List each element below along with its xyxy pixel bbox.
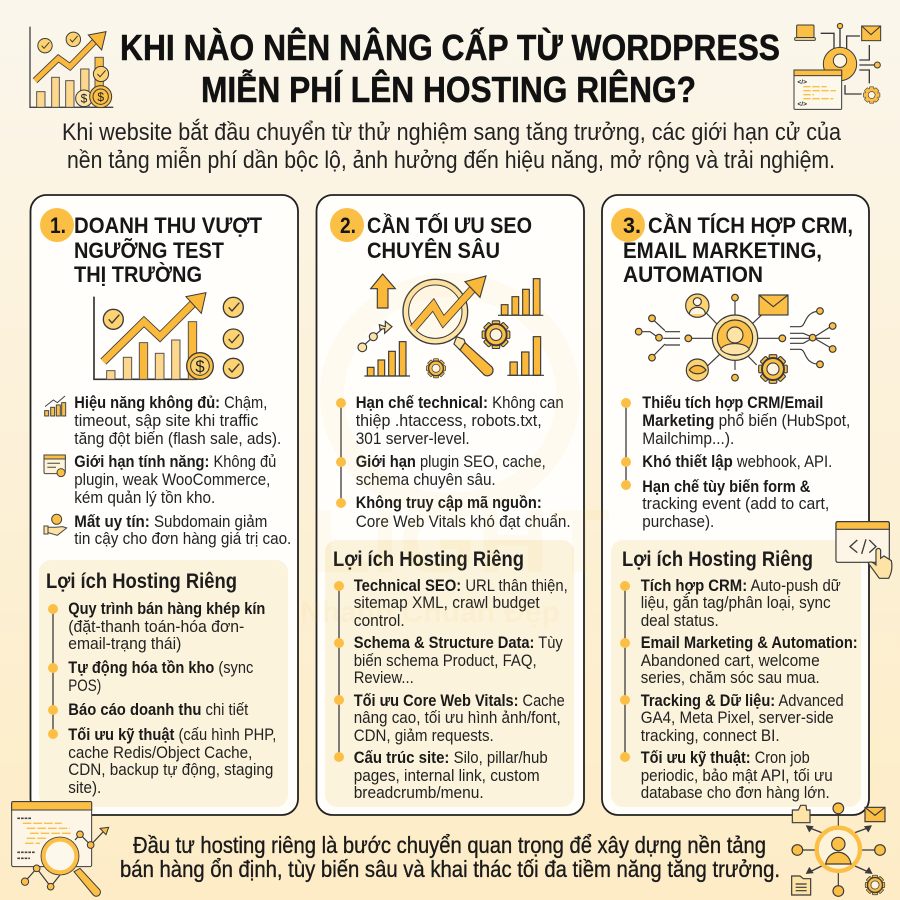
icon: growth chart with coins: $	[81, 92, 88, 106]
benefits box 3: periodic, bảo mật API, tối ưu	[641, 767, 833, 785]
benefits box 3: tracking, connect BI.	[641, 727, 780, 745]
watermark	[300, 285, 610, 629]
heading 2	[367, 212, 532, 263]
benefits box 3: Tối ưu kỹ thuật: Cron job	[641, 749, 810, 767]
icon: network with code window	[794, 23, 881, 109]
benefits box 2: pages, internal link, custom	[354, 767, 540, 785]
benefits box 1: Quy trình bán hàng khép kín	[68, 600, 265, 618]
issue list 1: tăng đột biến (flash sale, ads).	[74, 430, 281, 448]
title	[120, 26, 780, 110]
issue list 3: purchase).	[642, 513, 714, 531]
watermark: LIGHT	[310, 492, 610, 592]
issue list 3: Marketing phổ biến (HubSpot,	[642, 412, 850, 430]
footer text	[120, 832, 780, 882]
subtitle	[62, 119, 842, 174]
title: MIỄN PHÍ LÊN HOSTING RIÊNG?	[201, 68, 696, 110]
chart: revenue growth: $	[195, 357, 205, 376]
benefits box 1: Báo cáo doanh thu chi tiết	[68, 701, 249, 719]
heading 1: DOANH THU VƯỢT	[74, 213, 263, 238]
icon: user network	[792, 803, 885, 896]
benefits box 1: email-trạng thái)	[68, 635, 181, 653]
issue list 2: Core Web Vitals khó đạt chuẩn.	[356, 513, 571, 531]
benefits box 3: Tích hợp CRM: Auto-push dữ	[641, 577, 841, 595]
benefits box 1: cache Redis/Object Cache,	[68, 744, 252, 762]
heading 3: CẦN TÍCH HỢP CRM,	[648, 213, 853, 238]
benefits box 1: Lợi ích Hosting Riêng	[46, 569, 237, 593]
chart: revenue growth	[94, 293, 243, 379]
issue list 2: 301 server-level.	[356, 430, 470, 448]
benefits box 1: CDN, backup tự động, staging	[68, 761, 273, 779]
benefits box 3: liệu, gắn tag/phân loại, sync	[641, 593, 831, 612]
benefits box 1: Tự động hóa tồn kho (sync	[68, 659, 253, 677]
panel: SEO	[316, 195, 584, 815]
issue list 2: Hạn chế technical: Không can	[356, 394, 564, 412]
heading 3	[623, 213, 853, 287]
benefits box 3: Abandoned cart, welcome	[641, 652, 820, 670]
benefits box 1: site).	[68, 779, 101, 797]
issue list 1: Mất uy tín: Subdomain giảm	[74, 513, 267, 531]
issue list 2: Giới hạn plugin SEO, cache,	[356, 453, 546, 471]
benefits box 2: breadcrumb/menu.	[354, 784, 484, 802]
illustration: SEO magnifier	[358, 274, 544, 378]
benefits box 2	[325, 540, 574, 807]
panel: doanh thu	[30, 195, 298, 815]
benefits box 2: Cấu trúc site: Silo, pillar/hub	[354, 749, 548, 767]
number badge 1	[40, 208, 74, 242]
icon: code window with pointer hand	[836, 522, 892, 578]
benefits box 3: database cho đơn hàng lớn.	[641, 784, 830, 802]
heading 1: THỊ TRƯỜNG	[74, 262, 202, 287]
issue list 1: kém quản lý tồn kho.	[74, 489, 215, 507]
issue list 1: timeout, sập site khi traffic	[74, 412, 258, 430]
heading 1: NGƯỠNG TEST	[74, 238, 225, 263]
issue list 3: Thiếu tích hợp CRM/Email	[642, 394, 823, 412]
benefits box 3: Tracking & Dữ liệu: Advanced	[641, 692, 844, 710]
issue list 3: Mailchimp...).	[642, 430, 734, 448]
benefits box 3: series, chăm sóc sau mua.	[641, 669, 820, 687]
heading 3: AUTOMATION	[623, 262, 763, 287]
icon: network with code window: </>	[797, 79, 807, 86]
benefits box 2: Technical SEO: URL thân thiện,	[354, 577, 568, 595]
issue list 3	[621, 394, 850, 531]
issue list 3: tracking event (add to cart,	[642, 495, 829, 513]
icon: growth chart with coins	[30, 27, 113, 108]
issue list 2	[336, 394, 571, 531]
benefits box 1	[39, 560, 288, 807]
issue list 2: Không truy cập mã nguồn:	[356, 494, 542, 512]
watermark: Nhanh Chuẩn Đẹp	[300, 596, 560, 629]
issue list 2: thiệp .htaccess, robots.txt,	[356, 412, 542, 430]
issue list 1: Hiệu năng không đủ: Chậm,	[74, 394, 267, 412]
benefits box 2: nâng cao, tối ưu hình ảnh/font,	[354, 709, 561, 727]
issue list 2: schema chuyên sâu.	[356, 471, 496, 489]
benefits box 2: biến schema Product, FAQ,	[354, 652, 537, 670]
icon: network with code window: </>	[797, 101, 807, 108]
number badge 1: 1.	[50, 213, 66, 238]
issue list 3: Khó thiết lập webhook, API.	[642, 453, 832, 471]
benefits box 2: Review...	[354, 669, 414, 687]
illustration: CRM network	[635, 294, 836, 383]
number badge 2	[330, 208, 364, 242]
number badge 3	[611, 208, 645, 242]
icon: feature window	[44, 455, 65, 477]
benefits box 1: Tối ưu kỹ thuật (cấu hình PHP,	[68, 726, 276, 744]
title: KHI NÀO NÊN NÂNG CẤP TỪ WORDPRESS	[120, 26, 780, 68]
icon: performance	[45, 396, 66, 416]
benefits box 2: CDN, giảm requests.	[354, 727, 494, 745]
benefits box 3: Email Marketing & Automation:	[641, 634, 858, 652]
heading 3: EMAIL MARKETING,	[623, 238, 822, 263]
footer text: bán hàng ổn định, tùy biến sâu và khai thác tối đa tiềm năng tăng trưởng.	[120, 856, 780, 882]
benefits box 3	[611, 540, 861, 807]
heading 2: CHUYÊN SÂU	[367, 238, 500, 263]
benefits box 3: deal status.	[641, 612, 719, 630]
icon: growth chart with coins: $	[97, 90, 104, 104]
icon: hand with coin	[44, 514, 67, 535]
benefits box 2: Lợi ích Hosting Riêng	[333, 547, 524, 571]
benefits box 2: sitemap XML, crawl budget	[354, 594, 540, 612]
issue list 1: Giới hạn tính năng: Không đủ	[74, 453, 276, 471]
issue list 1	[74, 394, 291, 548]
issue list 1: plugin, weak WooCommerce,	[74, 471, 270, 489]
benefits box 2: Schema & Structure Data: Tùy	[354, 634, 564, 652]
benefits box 1: (đặt-thanh toán-hóa đơn-	[68, 618, 244, 636]
icon: code window with magnifier	[12, 802, 109, 896]
benefits box 1: POS)	[68, 677, 101, 695]
number badge 2: 2.	[340, 213, 356, 238]
heading 1	[74, 213, 263, 287]
number badge 3: 3.	[623, 213, 641, 238]
footer text: Đầu tư hosting riêng là bước chuyển quan trọng để xây dựng nền tảng	[133, 832, 766, 858]
panel: CRM	[602, 195, 869, 815]
benefits box 2: control.	[354, 612, 405, 630]
issue list 1: tin cậy cho đơn hàng giá trị cao.	[74, 530, 291, 548]
heading 2: CẦN TỐI ƯU SEO	[367, 212, 532, 238]
benefits box 2: Tối ưu Core Web Vitals: Cache	[354, 692, 565, 710]
benefits box 3: GA4, Meta Pixel, server-side	[641, 709, 834, 727]
benefits box 3: Lợi ích Hosting Riêng	[622, 547, 813, 571]
issue list 3: Hạn chế tùy biến form &	[642, 478, 811, 496]
